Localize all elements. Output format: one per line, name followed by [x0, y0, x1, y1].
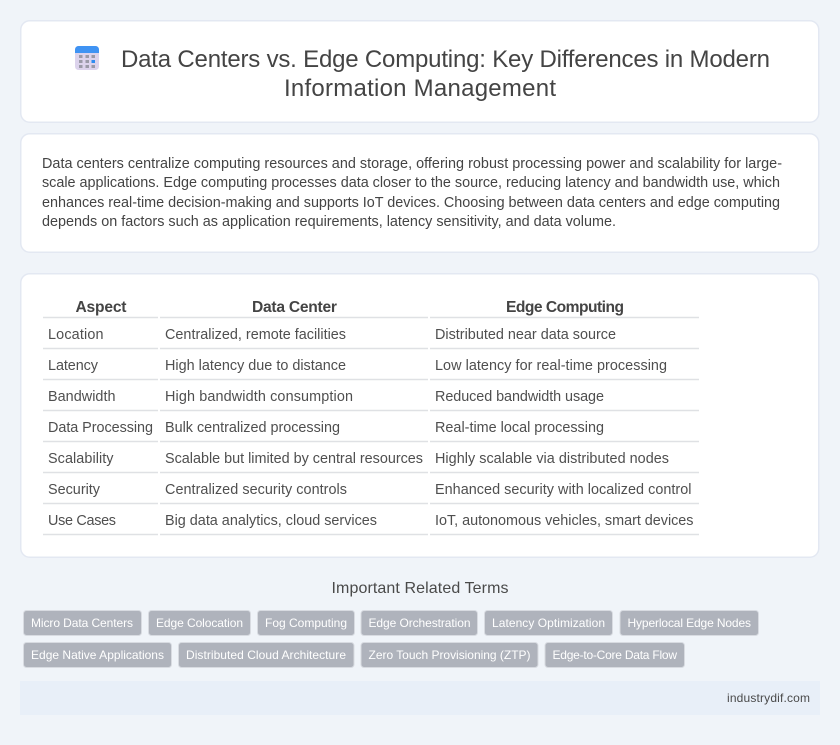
- text block: summary paragraph: Data centers centralize computing resources and storage, offering robust processing power and scalability for large-: [42, 156, 782, 172]
- table header: Data Center: [252, 299, 337, 316]
- tag: Micro Data Centers: [31, 616, 133, 630]
- heading: related terms: Important Related Terms: [332, 580, 508, 597]
- table row: data processing: [48, 420, 604, 436]
- title: Data Centers vs. Edge Computing: Key Differences in Modern: [121, 46, 770, 73]
- title: [121, 46, 770, 102]
- icon: calendar: [75, 46, 99, 70]
- panel: comparison table: [21, 274, 819, 557]
- table row: security: Security: [48, 482, 101, 498]
- tag: Edge Native Applications: [31, 648, 164, 662]
- tag: [620, 610, 758, 636]
- table row: data processing: Data Processing: [48, 420, 153, 436]
- table row: bandwidth: Reduced bandwidth usage: [435, 389, 604, 405]
- tag: [148, 610, 250, 636]
- tag: [545, 642, 684, 668]
- table row: use cases: [48, 513, 694, 529]
- text block: summary paragraph: enhances real-time decision-making and supports IoT devices. Choosing between data centers and edge computing: [42, 195, 780, 211]
- table header: Aspect: [76, 299, 126, 316]
- table header: Edge Computing: [506, 299, 624, 316]
- table row: data processing: Real-time local processing: [435, 420, 604, 436]
- table row: location: Location: [48, 327, 104, 343]
- table row: bandwidth: Bandwidth: [48, 389, 116, 405]
- tag: [178, 642, 354, 668]
- tag: [24, 610, 142, 636]
- tag: [361, 642, 538, 668]
- table row: scalability: Scalability: [48, 451, 114, 467]
- table row: latency: Low latency for real-time processing: [435, 358, 667, 374]
- table row: security: [48, 482, 692, 498]
- table row: security: Centralized security controls: [165, 482, 347, 498]
- tag: Zero Touch Provisioning (ZTP): [368, 648, 530, 662]
- footer: [20, 681, 820, 715]
- tag: Edge Colocation: [156, 616, 243, 630]
- table row: scalability: Highly scalable via distributed nodes: [435, 451, 669, 467]
- tag: Edge Orchestration: [368, 616, 470, 630]
- table row: location: Centralized, remote facilities: [165, 327, 346, 343]
- table row: use cases: Use Cases: [48, 513, 116, 529]
- table row: location: [48, 327, 616, 343]
- text block: summary paragraph: depends on factors such as application requirements, latency sensitivity, and data volume.: [42, 214, 616, 230]
- table row: bandwidth: High bandwidth consumption: [165, 389, 353, 405]
- tag: Distributed Cloud Architecture: [186, 648, 346, 662]
- table row: use cases: Big data analytics, cloud services: [165, 513, 377, 529]
- table row: scalability: Scalable but limited by central resources: [165, 451, 423, 467]
- tag: [24, 642, 172, 668]
- table row: latency: Latency: [48, 358, 99, 374]
- table row: location: Distributed near data source: [435, 327, 616, 343]
- tag: [361, 610, 478, 636]
- footer: industrydif.com: [727, 691, 810, 705]
- table row: bandwidth: [48, 389, 604, 405]
- table row: data processing: Bulk centralized processing: [165, 420, 340, 436]
- table row: security: Enhanced security with localized control: [435, 482, 692, 498]
- table header: [76, 299, 624, 316]
- tag: [484, 610, 612, 636]
- table row: use cases: IoT, autonomous vehicles, smart devices: [435, 513, 694, 529]
- tag: Latency Optimization: [492, 616, 605, 630]
- panel: related term tags: [24, 610, 758, 668]
- table row: latency: [48, 358, 667, 374]
- table row: latency: High latency due to distance: [165, 358, 346, 374]
- tag: [258, 610, 354, 636]
- panel: title card: [21, 21, 819, 122]
- title: Information Management: [284, 75, 556, 102]
- text block: summary paragraph: scale applications. Edge computing processes data closer to the source, reducing latency and bandwidth use, which: [42, 175, 780, 191]
- panel: summary: [21, 134, 819, 252]
- tag: Edge-to-Core Data Flow: [552, 648, 677, 662]
- tag: Hyperlocal Edge Nodes: [628, 616, 751, 630]
- tag: Fog Computing: [265, 616, 347, 630]
- text block: summary paragraph: [42, 156, 782, 230]
- table row: scalability: [48, 451, 669, 467]
